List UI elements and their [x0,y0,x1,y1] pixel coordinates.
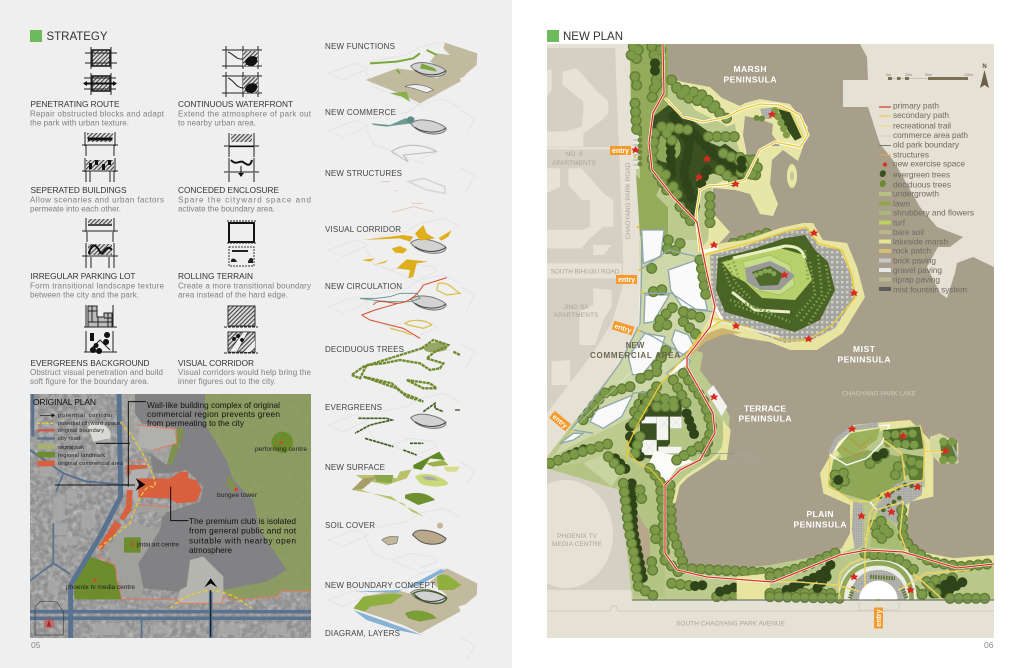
callout: premium club: atmosphere [189,545,232,555]
page number 05: 05 [31,640,41,650]
new commercial area label: NEW [626,341,645,350]
context labels: NO. 9 [566,151,583,158]
peninsula labels: TERRACE [744,404,786,414]
left page background [0,0,512,668]
layer labels: DECIDUOUS TREES [325,345,404,354]
entry tag: entry [551,414,568,430]
context labels [550,151,917,628]
map legend text: original commercial area [58,461,124,467]
peninsula labels: MIST [853,344,876,354]
map legend text [58,413,124,467]
layer labels: NEW FUNCTIONS [325,42,395,51]
marsh and west woods [630,47,767,243]
marsh peninsula land [668,78,808,262]
panel: rolling terrain: Create a more transitional boundary [178,282,311,290]
exercise space markers [631,110,950,593]
layer labels: VISUAL CORRIDOR [325,225,401,234]
entry tag: entry [876,609,883,627]
map legend text: city road [58,436,80,442]
layer labels: DIAGRAM, LAYERS [325,629,400,638]
panel: evergreens background: EVERGREENS BACKGROUND [30,358,150,368]
new commercial area label [590,341,680,360]
legend labels: lawn [893,198,910,208]
map legend text: regional landmark [58,453,105,459]
scale bar: 100m [964,73,973,77]
panel: rolling terrain: area instead of the hard edge. [178,290,288,300]
layer labels: NEW COMMERCE [325,108,396,117]
panel: seperated buildings [30,132,164,214]
panel: irregular parking lot [30,218,165,300]
scale bar [886,73,973,80]
panel: visual corridor [178,306,312,386]
layer labels: NEW BOUNDARY CONCEPT [325,581,435,590]
panel: continuous waterfront: Extend the atmosphere of park out [178,110,312,118]
context labels: APARTMENTS [552,160,597,167]
context labels: JINTAI [735,452,755,458]
legend labels: evergreen trees [893,169,950,179]
layer labels: NEW STRUCTURES [325,169,402,178]
layer: new structures [381,178,445,213]
map place labels [66,446,307,591]
chart: original plan map [30,394,311,638]
park boundary [632,599,994,601]
legend labels: mist fountain system [893,284,967,294]
entry tag: entry [613,323,632,335]
panel: irregular parking lot: Form transitional landscape texture [30,282,165,290]
panel: irregular parking lot: IRREGULAR PARKING LOT [30,271,136,281]
layer labels: NEW CIRCULATION [325,282,402,291]
legend labels: brick paving [893,256,936,266]
entry tag [616,275,637,284]
panel: conceded enclosure: activate the boundary area. [178,204,275,214]
icon: north arrow: N [982,64,987,70]
map title: ORIGINAL PLAN [33,397,96,407]
scale bar: 50m [925,73,932,77]
panel: seperated buildings: Allow scenaries and urban factors [30,196,164,204]
legend labels: deciduous trees [893,180,951,190]
layer: new circulation [328,275,475,367]
entry tag: entry [618,277,635,284]
context labels: APARTMENTS [554,312,599,319]
legend labels: secondary path [893,110,949,120]
legend labels: turf [893,218,906,228]
context labels: ART CENTRE [723,460,766,467]
icon: continuous waterfront [222,46,262,97]
layer: new surface [352,452,460,517]
layer: new boundary concept [328,568,477,660]
legend labels: old park boundary [893,140,960,150]
panel: evergreens background [30,305,163,386]
mist lakeside edge [687,328,742,355]
layer labels [325,42,435,638]
scale bar: 0m [886,73,891,77]
legend labels: shrubbery and flowers [893,208,974,218]
legend labels: primary path [893,101,939,111]
callout: wall-like building complex: from permeating to the city [147,418,245,428]
plain peninsula [737,420,994,601]
map legend text: potential cityward space [58,421,120,427]
heading: new plan: NEW PLAN [563,31,623,43]
panel: rolling terrain [178,221,311,300]
legend labels: gravel paving [893,265,942,275]
map place labels: performing centre [255,446,307,453]
panel: penetrating route [30,47,165,128]
lake [668,44,994,568]
panel: penetrating route: PENETRATING ROUTE [30,99,120,109]
panel: conceded enclosure: CONCEDED ENCLOSURE [178,185,279,195]
panel: continuous waterfront: to nearby urban area. [178,118,256,128]
panel: layer diagrams [325,42,477,660]
layer: soil cover [328,508,475,600]
legend labels: lakeside marsh [893,236,948,246]
legend swatches [879,107,891,291]
legend labels: commerce area path [893,130,968,140]
icon: evergreens background [84,305,117,354]
panel: penetrating route: the park with urban texture. [30,118,129,128]
panel: continuous waterfront: CONTINUOUS WATERFRONT [178,99,293,109]
context labels: CHAOYANG PARK LAKE [842,390,917,398]
entry tag [610,146,631,155]
callout: premium club: The premium club is isolated [189,516,296,526]
panel: site plan [519,44,994,638]
terrace peninsula [547,365,780,597]
panel: conceded enclosure [178,133,311,214]
art centre leader [697,452,735,454]
icon: penetrating route [83,47,117,95]
legend [879,101,974,294]
primary path [649,44,994,582]
parking and entry details [633,134,640,228]
layer: visual corridor [328,218,475,310]
commercial plaza [553,230,713,457]
legend labels: undergrowth [893,189,939,199]
icon: north arrow [980,64,989,88]
panel: visual corridor: inner figures out to the city. [178,377,276,386]
icon: seperated buildings [82,132,118,182]
callout: wall-like building complex: commercial region prevents green [147,409,280,419]
panel: evergreens background: soft figure for the boundary area. [30,377,149,386]
panel: seperated buildings: SEPERATED BUILDINGS [30,185,127,195]
park base [547,44,994,600]
page number 06: 06 [984,640,994,650]
icon: rolling terrain [227,221,257,266]
panel: evergreens background: Obstruct visual penetration and build [30,368,163,377]
map place labels: jintai art centre [136,542,179,548]
icon: irregular parking lot [82,218,118,268]
layer labels: NEW SURFACE [325,463,385,472]
peninsula labels: PLAIN [806,509,834,519]
peninsula labels: PENINSULA [738,414,792,424]
heading: strategy: STRATEGY [46,31,108,43]
panel: conceded enclosure: Spare the cityward space and [178,196,311,204]
entry tag [612,321,634,335]
panel: visual corridor: Visual corridors would help bring the [178,368,312,377]
callout: premium club: from general public and not [189,526,297,536]
peninsula labels: MARSH [734,64,766,74]
panel: rolling terrain: ROLLING TERRAIN [178,271,253,281]
context labels: SOUTH CHAOYANG PARK AVENUE [676,620,786,628]
right page background [512,0,1024,668]
layer labels: SOIL COVER [325,521,375,530]
layer: evergreens [328,393,475,485]
map legend text: original park [58,445,84,451]
map place labels: bungee tower [217,492,258,499]
layer: deciduous trees [352,340,460,402]
legend labels: recreational trail [893,120,951,130]
context labels: PHOENIX TV [557,533,598,540]
context labels: MEDIA CENTRE [552,541,603,548]
west urban blocks [519,48,632,590]
peninsula labels [724,64,890,530]
panel: continuous waterfront [178,46,312,128]
entry tag [549,411,571,431]
secondary and recreational paths [627,98,808,460]
icon: visual corridor [224,306,258,353]
panel: irregular parking lot: between the city and the park. [30,290,139,300]
map place labels: phoenix tv media centre [66,584,135,591]
layer: new functions [328,42,477,133]
legend labels: rock patch [893,246,931,256]
map legend text: original boundary [58,428,104,434]
legend labels: riprap paving [893,275,940,285]
mist peninsula [686,223,865,353]
context labels: SOUTH BIHUJIU ROAD [550,268,620,276]
entry tag: entry [612,148,629,155]
legend labels: bare soil [893,227,924,237]
panel: visual corridor: VISUAL CORRIDOR [178,358,254,368]
layer: new commerce [328,99,475,191]
panel: penetrating route: Repair obstructed blocks and adapt [30,110,165,118]
peninsula labels: PENINSULA [794,520,846,530]
scale bar: 20m [905,73,912,77]
peninsula labels: PENINSULA [724,74,776,84]
context labels: CHAOYANG PARK ROAD [625,162,632,240]
south road edge [547,606,994,611]
marsh east arm trees [740,107,803,177]
map legend text: potential corridor [58,413,113,419]
legend labels [893,101,974,294]
legend labels: new exercise space [893,159,965,169]
layer labels: EVERGREENS [325,403,382,412]
icon: conceded enclosure [224,133,259,182]
peninsula labels: PENINSULA [838,354,890,364]
legend labels: structures [893,150,929,160]
callout: wall-like building complex [147,400,280,428]
panel: seperated buildings: permeate into each other. [30,204,121,214]
west lawn [630,44,700,262]
new commercial area label: COMMERCIAL AREA [590,351,680,360]
callout: premium club [189,516,297,555]
context labels: JING SA [563,304,589,311]
callout: premium club: suitable with nearby open [189,536,296,546]
entry tag [874,608,883,628]
callout: wall-like building complex: Wall-like building complex of original [147,400,280,410]
